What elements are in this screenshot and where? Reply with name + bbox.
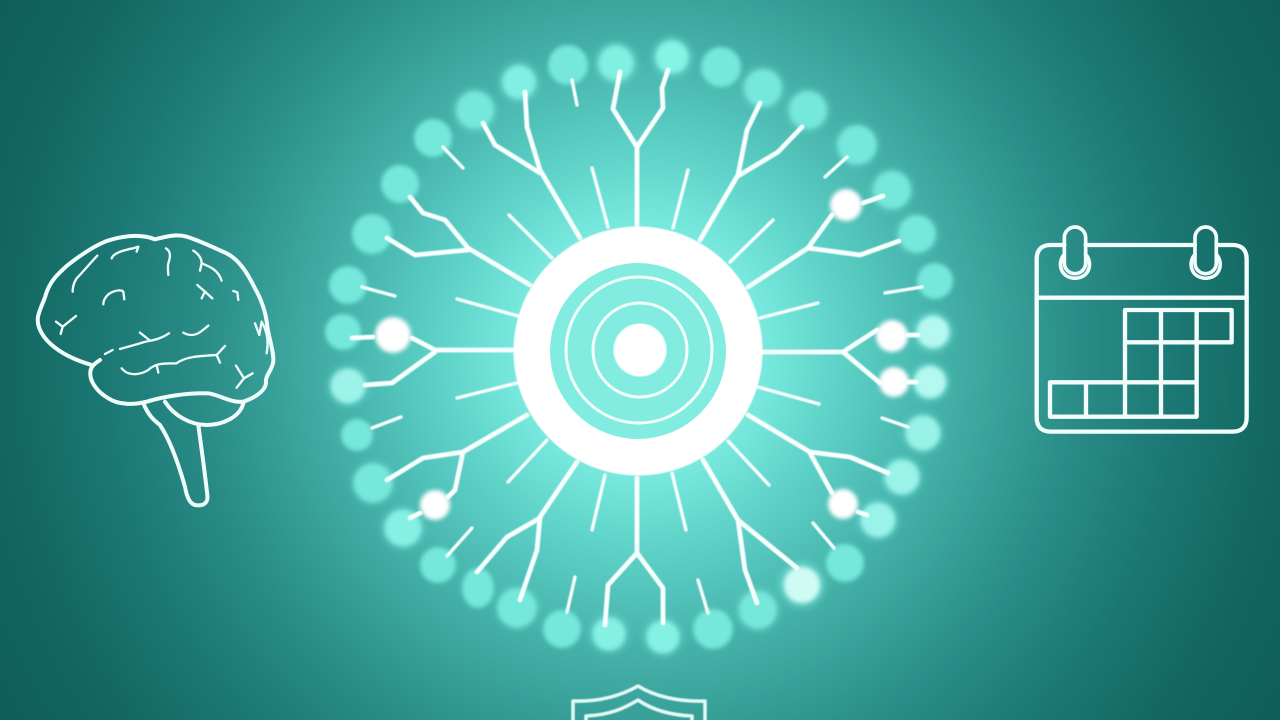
- icon: brain: [38, 235, 273, 505]
- brain outline: [38, 235, 273, 505]
- hub centre dot: [614, 324, 666, 376]
- brain folds: [56, 247, 268, 388]
- calendar binder rings: [1060, 227, 1220, 278]
- icon: calendar: [1037, 227, 1247, 432]
- calendar day grid: [1050, 310, 1232, 417]
- calendar header line: [1037, 291, 1247, 304]
- hub teal disc: [550, 263, 726, 439]
- hub outer white disc: [514, 226, 762, 476]
- white active nodes: [375, 189, 909, 520]
- shield inner edge: [586, 700, 692, 720]
- calendar frame: [1037, 245, 1247, 432]
- teal nodes: [325, 41, 953, 653]
- neural hub diagram: [325, 38, 953, 655]
- hub inner ring: [593, 303, 687, 397]
- central target hub: [514, 226, 762, 476]
- icon: shield: [573, 686, 705, 720]
- branching trunks: [352, 70, 918, 625]
- branching lines: [352, 70, 922, 625]
- shield outer edge: [573, 686, 705, 720]
- hub outer ring: [566, 277, 712, 423]
- short spokes: [362, 80, 922, 613]
- node halo layer: [329, 38, 952, 655]
